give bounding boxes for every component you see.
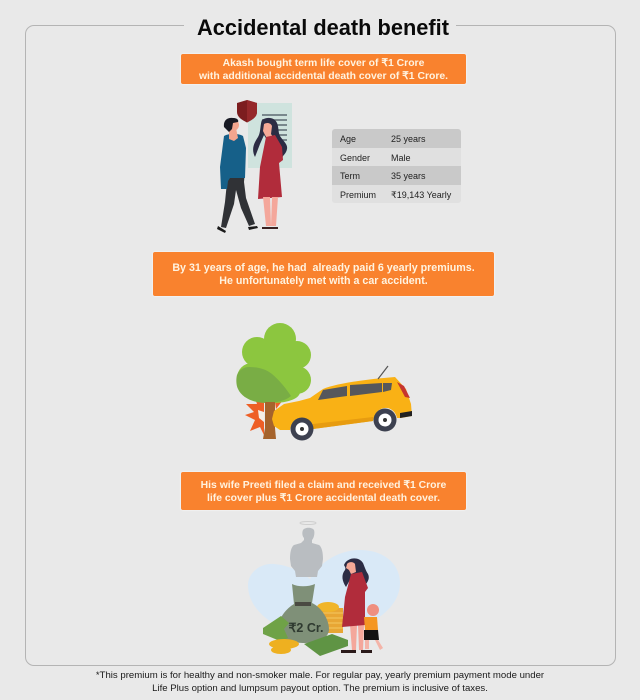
- tree foliage: [237, 323, 311, 403]
- woman face: [263, 123, 273, 140]
- footnote: [96, 670, 544, 694]
- banner: term cover purchase: with additional accidental death cover of ₹1 Crore.: [199, 70, 448, 82]
- footnote: *This premium is for healthy and non-smoker male. For regular pay, yearly premium payment mode under: [96, 670, 544, 681]
- impact burst: [245, 395, 264, 435]
- man sweater: [220, 134, 246, 189]
- banner: term cover purchase: [181, 54, 466, 84]
- woman legs: [263, 197, 278, 226]
- shield: [237, 100, 257, 122]
- row: premium: [332, 184, 461, 203]
- row: term: [332, 166, 461, 184]
- tree trunk: [263, 402, 276, 439]
- row: age: [332, 129, 461, 148]
- bag label: ₹2 Cr.: [288, 621, 324, 635]
- banner: accident event: [153, 252, 494, 296]
- banner: claim received: life cover plus ₹1 Crore accidental death cover.: [207, 493, 440, 504]
- child: [367, 604, 379, 616]
- row: premium: ₹19,143 Yearly: [391, 190, 451, 200]
- woman dress: [258, 135, 283, 199]
- woman hair: [342, 558, 369, 587]
- row: gender: Gender: [340, 152, 370, 162]
- row: premium: Premium: [340, 190, 376, 200]
- woman face: [346, 562, 356, 574]
- row: gender: Male: [391, 152, 411, 162]
- policy document: [248, 103, 292, 168]
- row: term: Term: [340, 171, 360, 181]
- money bag: [278, 584, 329, 643]
- tail light: [397, 382, 410, 398]
- row: age: 25 years: [391, 134, 426, 144]
- front wheel: [290, 418, 314, 440]
- footnote: Life Plus option and lumpsum payout option. The premium is inclusive of taxes.: [152, 682, 488, 694]
- rear bumper: [400, 411, 412, 418]
- woman dress: [342, 572, 368, 627]
- car body: [272, 377, 412, 430]
- ghost figure: [290, 528, 323, 577]
- banner: claim received: [181, 472, 466, 510]
- antenna: [378, 366, 388, 379]
- heart background: [248, 550, 400, 627]
- table: policy details: [332, 129, 461, 203]
- man legs: [221, 170, 255, 228]
- cash left: [263, 616, 289, 641]
- cash right: [304, 634, 348, 656]
- coins front: [269, 639, 299, 654]
- woman hair: [253, 118, 287, 158]
- banner: claim received: His wife Preeti filed a claim and received ₹1 Crore: [201, 480, 446, 491]
- banner: term cover purchase: Akash bought term life cover of ₹1 Crore: [223, 58, 424, 68]
- coin stack: [317, 602, 343, 633]
- row: term: 35 years: [391, 171, 426, 181]
- man head: [229, 128, 238, 141]
- rear wheel: [374, 408, 396, 432]
- car windows: [318, 386, 347, 400]
- woman legs: [350, 625, 364, 650]
- tree shadow: [236, 367, 291, 403]
- row: age: Age: [340, 134, 356, 144]
- car underside: [313, 417, 373, 429]
- banner: accident event: By 31 years of age, he had already paid 6 yearly premiums.: [172, 262, 475, 274]
- title: Accidental death benefit: [197, 15, 449, 40]
- banner: accident event: He unfortunately met with a car accident.: [219, 275, 428, 287]
- row: gender: [332, 148, 461, 166]
